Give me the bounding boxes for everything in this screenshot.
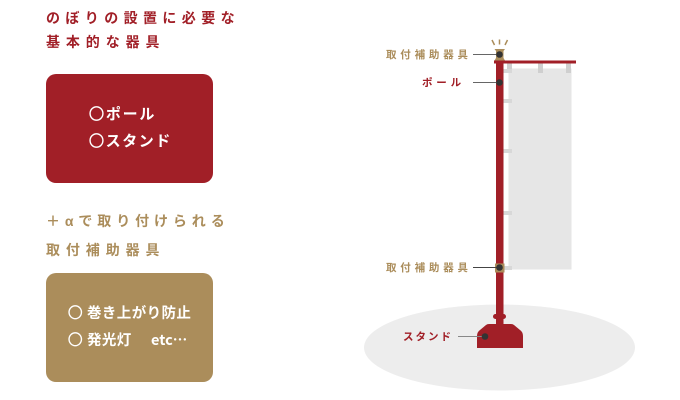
heading: optional attachments line 2: 取付補助器具 <box>46 242 165 258</box>
panel: basic equipment list <box>46 74 213 183</box>
label: stand <box>403 331 488 343</box>
list item: roll-up prevention: 巻き上がり防止 <box>87 302 191 323</box>
label: top attachment <box>386 48 503 61</box>
label: lower attachment <box>386 261 503 274</box>
stand <box>477 324 523 348</box>
panel: optional attachments list <box>46 273 213 382</box>
list item: light: etc… <box>151 329 187 350</box>
list item: stand: ○スタンド <box>89 130 172 151</box>
label: top attachment: 取付補助器具 <box>386 48 472 61</box>
ground ellipse <box>364 304 635 390</box>
top attachment with light rays <box>492 40 508 60</box>
heading: basic equipment line 2: 基本的な器具 <box>46 34 165 50</box>
banner <box>500 63 572 270</box>
lower attachment <box>495 264 504 272</box>
heading: basic equipment line 1: のぼりの設置に必要な <box>46 10 240 26</box>
label: pole: ポール <box>422 77 465 89</box>
list item: pole: ○ポール <box>89 103 156 124</box>
label: stand: スタンド <box>403 331 453 343</box>
list item: light <box>68 329 187 350</box>
heading: optional attachments line 1: ＋αで取り付けられる <box>46 213 230 229</box>
label: lower attachment: 取付補助器具 <box>386 261 472 274</box>
pole <box>493 60 576 326</box>
list item: light: 発光灯 <box>87 329 132 350</box>
list item: roll-up prevention: ○ <box>68 302 82 323</box>
label: pole <box>422 77 503 89</box>
list item: light: ○ <box>68 329 82 350</box>
